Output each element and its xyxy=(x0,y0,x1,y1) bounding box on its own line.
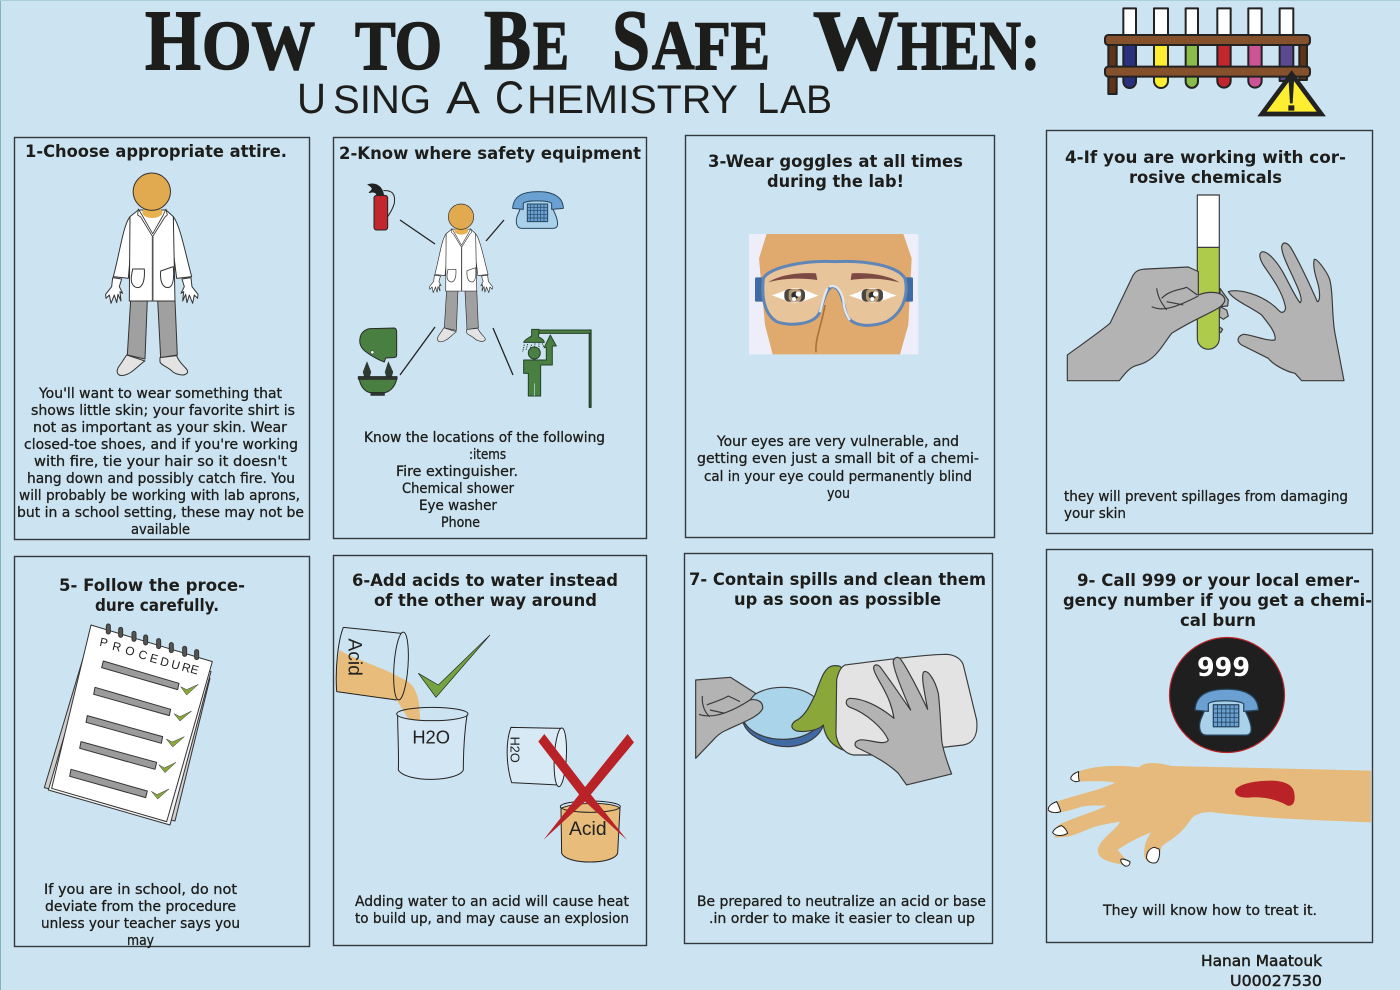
heading: 2-Know where safety equipment xyxy=(339,144,641,164)
body text: but in a school setting, these may not be xyxy=(17,505,304,521)
body text: will probably be working with lab aprons, xyxy=(19,488,300,504)
subtitle: L xyxy=(757,74,779,123)
body text: Fire extinguisher. xyxy=(396,464,518,480)
notebook label: C xyxy=(137,647,149,663)
body text: They will know how to treat it. xyxy=(1102,903,1317,919)
icon: hands cleaning a spill xyxy=(696,654,977,785)
body text: Chemical shower xyxy=(402,481,514,497)
icon: burned arm and hand xyxy=(1048,763,1371,866)
body text: cal in your eye could permanently blind xyxy=(704,469,972,485)
body text: hang down and possibly catch fire. You xyxy=(27,471,295,487)
icon: person in lab coat xyxy=(106,173,198,376)
icon: 999 telephone badge: 999 xyxy=(1197,653,1250,683)
panel: 5 follow procedure xyxy=(14,556,310,949)
heading xyxy=(1065,148,1346,188)
notebook label xyxy=(98,635,200,677)
heading xyxy=(689,570,986,610)
heading: during the lab! xyxy=(767,172,904,192)
icon: eye washer xyxy=(358,328,397,395)
heading: 6-Add acids to water instead xyxy=(352,571,618,591)
body text: available xyxy=(131,522,190,538)
panel: 6 add acids to water xyxy=(334,556,646,946)
heading xyxy=(352,571,618,611)
body text: your skin xyxy=(1064,506,1126,522)
body text: Your eyes are very vulnerable, and xyxy=(716,434,959,450)
body text: may xyxy=(127,933,154,949)
body text: Eye washer xyxy=(419,498,497,514)
icon: pouring water into acid, wrong: H2O xyxy=(508,737,522,763)
icon: gloved hands holding test tube xyxy=(1067,195,1344,381)
icon: test tube rack with warning triangle xyxy=(1105,8,1321,114)
body text: You'll want to wear something that xyxy=(38,386,282,402)
body text: not as important as your skin. Wear xyxy=(33,420,287,436)
title: HEN: xyxy=(897,8,1040,85)
subtitle: C xyxy=(495,72,524,123)
author credit: U00027530 xyxy=(1230,972,1322,990)
heading: gency number if you get a chemi- xyxy=(1063,591,1372,611)
ring binding xyxy=(106,624,199,660)
subtitle xyxy=(297,72,832,123)
heading xyxy=(1063,571,1372,631)
heading xyxy=(708,152,963,192)
title xyxy=(145,0,1040,88)
body text xyxy=(41,882,240,949)
heading: of the other way around xyxy=(374,591,597,611)
subtitle: HEMISTRY xyxy=(527,78,738,122)
heading: cal burn xyxy=(1180,611,1256,631)
body text: closed-toe shoes, and if you're working xyxy=(24,437,298,453)
body text: with fire, tie your hair so it doesn't xyxy=(34,454,288,470)
body text: If you are in school, do not xyxy=(44,882,238,898)
body text xyxy=(355,894,629,927)
body text xyxy=(697,434,979,502)
icon: pouring acid into water, correct xyxy=(336,627,490,779)
icon: person xyxy=(430,204,492,342)
body text: shows little skin; your favorite shirt is xyxy=(31,403,295,419)
heading: 1-Choose appropriate attire. xyxy=(25,142,287,162)
body text: Phone xyxy=(441,515,480,531)
icon: pouring acid into water, correct: H2O xyxy=(412,726,450,747)
body text: getting even just a small bit of a chemi- xyxy=(697,451,979,467)
notebook label: O xyxy=(123,643,136,659)
panel: 9 call emergency xyxy=(1046,550,1372,942)
body text: they will prevent spillages from damaging xyxy=(1064,489,1348,505)
body text: Adding water to an acid will cause heat xyxy=(355,894,629,910)
panel: 7 contain spills xyxy=(684,554,992,944)
title: E xyxy=(533,8,569,85)
body text xyxy=(1064,489,1348,522)
subtitle: SING xyxy=(333,78,431,122)
panel: 2 safety equipment xyxy=(334,138,646,538)
heading: rosive chemicals xyxy=(1129,168,1282,188)
notebook label: U xyxy=(169,657,182,673)
body text: .in order to make it easier to clean up xyxy=(709,911,975,927)
heading: 5- Follow the proce- xyxy=(59,576,245,596)
body text: you xyxy=(827,486,850,502)
author credit: Hanan Maatouk xyxy=(1201,952,1322,970)
notebook label: P xyxy=(98,635,109,650)
body text: :items xyxy=(469,447,506,463)
icon: telephone xyxy=(513,192,563,228)
icon: pouring water into acid, wrong xyxy=(507,727,634,862)
icon: pouring water into acid, wrong: Acid xyxy=(569,819,607,840)
heading: 4-If you are working with cor- xyxy=(1065,148,1346,168)
heading: dure carefully. xyxy=(95,596,219,616)
panel: 1 choose attire xyxy=(14,138,310,540)
title: OW xyxy=(202,8,315,85)
icon: pouring acid into water, correct: Acid xyxy=(343,638,364,676)
icon: 999 telephone badge xyxy=(1170,638,1284,752)
panel: 4 corrosive chemicals xyxy=(1046,130,1372,534)
notebook label: R xyxy=(180,660,193,676)
subtitle: A xyxy=(446,72,480,123)
heading: 7- Contain spills and clean them xyxy=(689,570,986,590)
connector lines xyxy=(400,220,513,375)
body text: Know the locations of the following xyxy=(364,430,605,446)
body text: to build up, and may cause an explosion xyxy=(355,911,629,927)
notebook label: R xyxy=(111,639,123,655)
body text: unless your teacher says you xyxy=(41,916,240,932)
body text xyxy=(17,386,304,538)
title: AFE xyxy=(652,8,770,85)
author credit xyxy=(1201,952,1322,990)
subtitle: U xyxy=(297,75,326,123)
title: TO xyxy=(355,8,442,85)
body text: deviate from the procedure xyxy=(45,899,236,915)
body text xyxy=(364,430,605,531)
body text: Be prepared to neutralize an acid or base xyxy=(697,894,986,910)
body text xyxy=(697,894,986,927)
icon: procedure notebook xyxy=(44,624,212,825)
icon: face with goggles xyxy=(749,234,918,354)
icon: chemical shower xyxy=(523,329,591,407)
heading: up as soon as possible xyxy=(734,590,941,610)
notebook label: E xyxy=(148,651,160,666)
heading: 9- Call 999 or your local emer- xyxy=(1077,571,1360,591)
heading: 3-Wear goggles at all times xyxy=(708,152,963,172)
notebook label: D xyxy=(158,654,171,670)
notebook label: E xyxy=(189,662,200,677)
icon: fire extinguisher xyxy=(368,184,395,230)
panel: 3 goggles xyxy=(686,136,994,538)
subtitle: AB xyxy=(780,78,832,122)
heading xyxy=(59,576,245,616)
